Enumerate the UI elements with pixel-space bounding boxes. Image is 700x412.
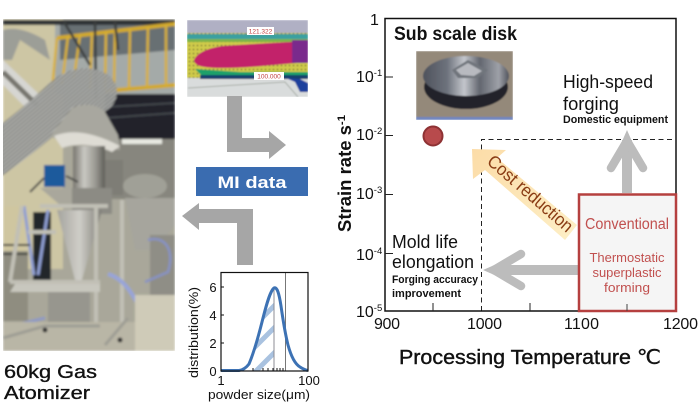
y axis title: Strain rate s [335, 128, 355, 232]
y tick labels: -3 [374, 185, 382, 196]
chart: powder size distribution: powder size(μm) [208, 387, 310, 402]
y tick labels: -5 [374, 303, 382, 314]
x tick labels [374, 316, 698, 333]
chart: powder size distribution: 1 [217, 373, 225, 388]
railing [57, 24, 175, 38]
frame [7, 200, 124, 322]
y tick labels: 10 [356, 186, 374, 203]
text: mold life elongation: Mold life [392, 232, 458, 252]
arrow: higher strain rate [611, 130, 643, 193]
box: conventional process: forming [604, 280, 650, 295]
MI data label [196, 167, 308, 196]
y tick labels: 10 [356, 69, 374, 86]
y tick labels [356, 12, 382, 321]
chart: powder size distribution [186, 272, 320, 402]
y tick labels: 10 [356, 127, 374, 144]
x tick labels: 1100 [564, 316, 599, 333]
text: mold life elongation: improvement [392, 288, 461, 300]
MI data label: MI data [218, 174, 287, 192]
text: high-speed forging [563, 72, 668, 126]
y axis title: -1 [336, 115, 348, 125]
caption: 60kg Gas Atomizer: Atomizer [4, 383, 90, 403]
x tick labels: 1000 [467, 316, 502, 333]
arrow: cost reduction: Cost reduction [483, 151, 577, 236]
box: conventional process: Conventional [585, 216, 669, 233]
data point: sub scale disk [424, 126, 442, 146]
chart: powder size distribution: 4 [209, 308, 217, 323]
text: high-speed forging: Domestic equipment [563, 114, 668, 126]
text: mold life elongation: Forging accuracy [392, 274, 479, 286]
y tick labels: 10 [356, 247, 374, 264]
image: MI simulation contour: 100.000 [257, 74, 281, 80]
x tick labels: 900 [374, 316, 400, 333]
y tick labels: 10 [356, 304, 374, 321]
box: conventional process [579, 194, 676, 311]
arrow: lower temperature [483, 254, 578, 286]
chart: processing map [335, 12, 698, 369]
chart: powder size distribution: 6 [209, 280, 217, 295]
photo: 60kg gas atomizer [0, 19, 175, 351]
axes [385, 18, 676, 311]
photo: sub scale disk [416, 51, 513, 120]
cylinder and cone [73, 146, 105, 192]
chart: powder size distribution: 100 [298, 373, 320, 388]
hose [0, 89, 96, 156]
y tick labels: 1 [370, 12, 379, 29]
box: conventional process: Thermostatic [590, 250, 665, 265]
x tick labels: 1200 [663, 316, 698, 333]
heading: sub scale disk: Sub scale disk [394, 24, 517, 45]
text: mold life elongation: elongation [392, 252, 474, 272]
box: conventional process: superplastic [592, 265, 662, 280]
image: MI simulation contour: 121.322 [249, 28, 273, 36]
text: mold life elongation [392, 232, 479, 300]
chart: powder size distribution: 2 [209, 336, 217, 351]
y tick labels: -2 [374, 126, 382, 137]
plot hatching [254, 303, 274, 370]
dashed process limit [482, 140, 676, 311]
chart: powder size distribution: 0 [209, 364, 217, 379]
caption: 60kg Gas Atomizer: 60kg Gas [4, 362, 97, 382]
arrow: powder data to atomizer [182, 203, 253, 265]
text: high-speed forging: High-speed [563, 72, 653, 92]
chart: powder size distribution: distribution(%) [186, 287, 201, 378]
y tick labels: -4 [374, 246, 382, 257]
text: high-speed forging: forging [563, 94, 619, 114]
caption: 60kg Gas Atomizer [4, 362, 97, 403]
arrow: MI image to data [227, 96, 286, 159]
image: MI simulation contour [187, 20, 308, 97]
x axis title: Processing Temperature ℃ [399, 347, 661, 369]
y tick labels: -1 [374, 68, 382, 79]
